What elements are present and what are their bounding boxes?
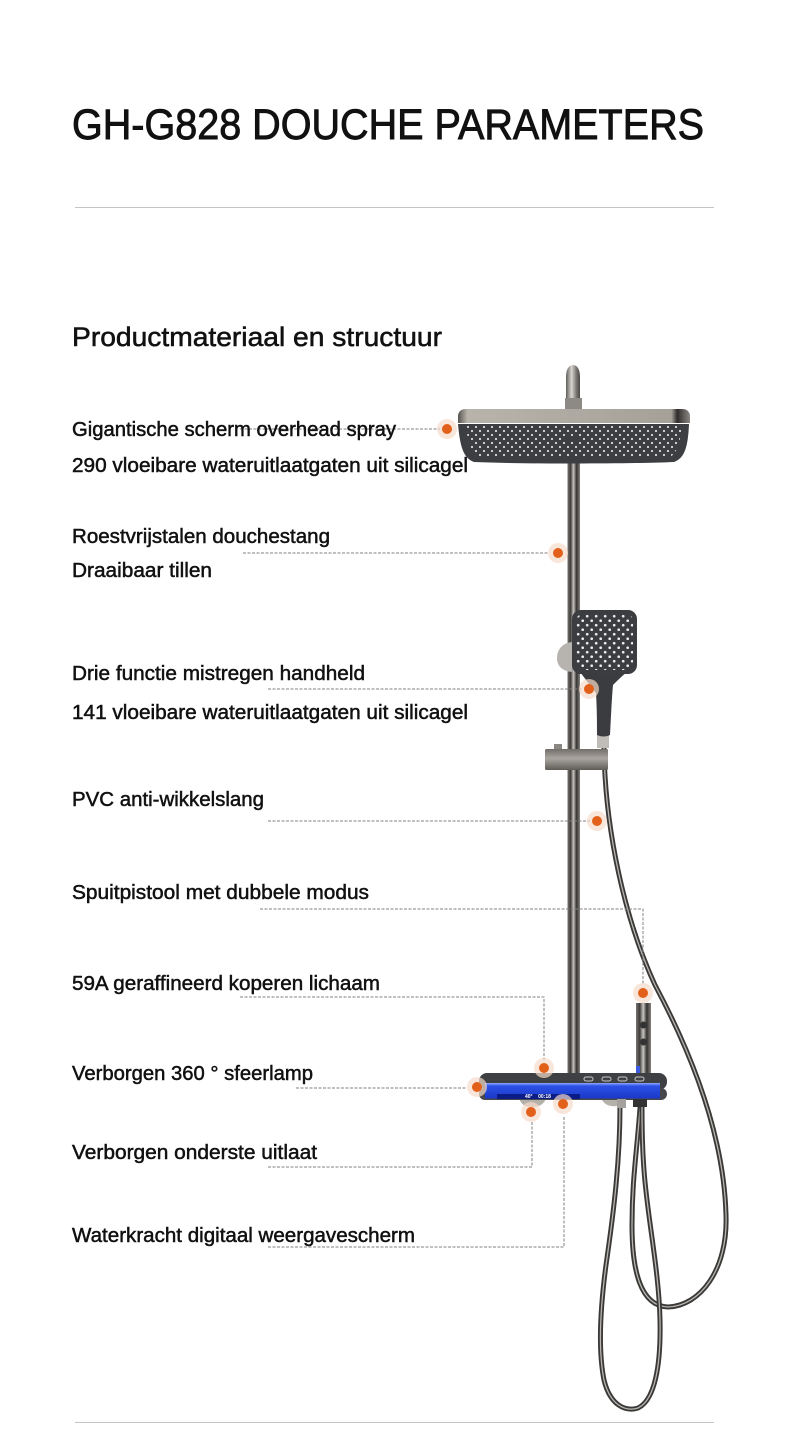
label: ambient lamp: Verborgen 360 ° sfeerlamp bbox=[72, 1063, 313, 1085]
label: overhead spray: Gigantische scherm overhead spray bbox=[72, 419, 396, 441]
wall bracket bbox=[557, 642, 572, 672]
shower product illustration bbox=[458, 365, 726, 1409]
section heading: Productmateriaal en structuur bbox=[72, 322, 442, 352]
dashed leader lines bbox=[240, 429, 643, 1247]
label: hand shower: Drie functie mistregen handheld bbox=[72, 663, 365, 685]
orange marker dots bbox=[437, 419, 653, 1122]
slider clamp bbox=[545, 744, 608, 770]
label: overhead spray holes: 290 vloeibare wateruitlaatgaten uit silicagel bbox=[72, 455, 468, 477]
overhead shower head bbox=[458, 409, 690, 464]
title: GH-G828 DOUCHE PARAMETERS bbox=[72, 101, 704, 149]
top divider bbox=[75, 207, 714, 208]
label: hose: PVC anti-wikkelslang bbox=[72, 789, 264, 811]
thermostat pipe bbox=[636, 1003, 651, 1074]
label: hand shower holes: 141 vloeibare wateruitlaatgaten uit silicagel bbox=[72, 702, 468, 724]
callout labels bbox=[72, 419, 468, 1247]
label: shower rod: Roestvrijstalen douchestang bbox=[72, 526, 330, 548]
label: rotate and lift: Draaibaar tillen bbox=[72, 560, 212, 582]
label: bottom outlet: Verborgen onderste uitlaat bbox=[72, 1142, 317, 1164]
shower rod bbox=[568, 462, 580, 1082]
label: spray gun: Spuitpistool met dubbele modus bbox=[72, 882, 369, 904]
wall brackets below shelf bbox=[519, 1098, 546, 1107]
hose: long hand shower hose bbox=[604, 748, 726, 1307]
shelf buttons bbox=[584, 1077, 644, 1081]
label: copper body: 59A geraffineerd koperen lichaam bbox=[72, 973, 380, 995]
hand shower bbox=[572, 610, 637, 748]
digital display readout: 40° 00:18 bbox=[525, 1094, 551, 1100]
curved top arm bbox=[566, 365, 580, 399]
outlet fittings bbox=[617, 1099, 647, 1108]
hose: lower loop bbox=[600, 1106, 660, 1409]
label: digital display: Waterkracht digitaal weergavescherm bbox=[72, 1225, 415, 1247]
shelf with ambient light bbox=[479, 1073, 667, 1100]
bottom divider bbox=[75, 1422, 714, 1423]
